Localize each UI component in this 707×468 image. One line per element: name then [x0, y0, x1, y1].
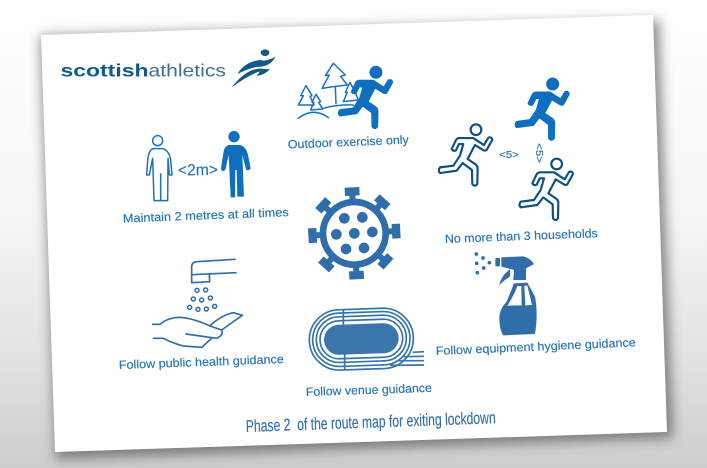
icon: person solid — [221, 131, 251, 197]
icon: outline runner right — [519, 159, 573, 220]
label: public health guidance: Follow public health guidance — [119, 352, 284, 372]
icon: outdoor runner — [339, 67, 392, 128]
label: maintain 2 metres: Maintain 2 metres at all times — [123, 205, 289, 225]
caption: phase 2: Phase 2 of the route map for exiting lockdown — [245, 408, 496, 436]
label: 2m distance: <2m> — [178, 162, 218, 179]
icon: virus — [306, 185, 403, 282]
icon: spray bottle — [474, 252, 537, 335]
icon: tap and hand — [153, 259, 242, 347]
label: outdoor exercise only: Outdoor exercise only — [288, 133, 409, 151]
icon: outline runner left — [439, 124, 492, 186]
logo: scottishathletics: athletics — [148, 60, 226, 80]
icon: running track — [308, 307, 424, 371]
logo: scottishathletics: scottish — [60, 60, 148, 80]
label: 5 horizontal: <5> — [499, 149, 519, 161]
label: no more than 3 households: No more than 3 households — [445, 226, 598, 246]
icon: trees — [298, 63, 358, 118]
label: equipment hygiene guidance: Follow equipment hygiene guidance — [436, 335, 636, 358]
icon: person outline — [147, 136, 172, 201]
icon: solid runner — [515, 78, 569, 140]
label: venue guidance: Follow venue guidance — [306, 381, 432, 399]
label: 5 vertical: <5> — [533, 143, 545, 163]
logo: scottishathletics — [60, 49, 275, 87]
